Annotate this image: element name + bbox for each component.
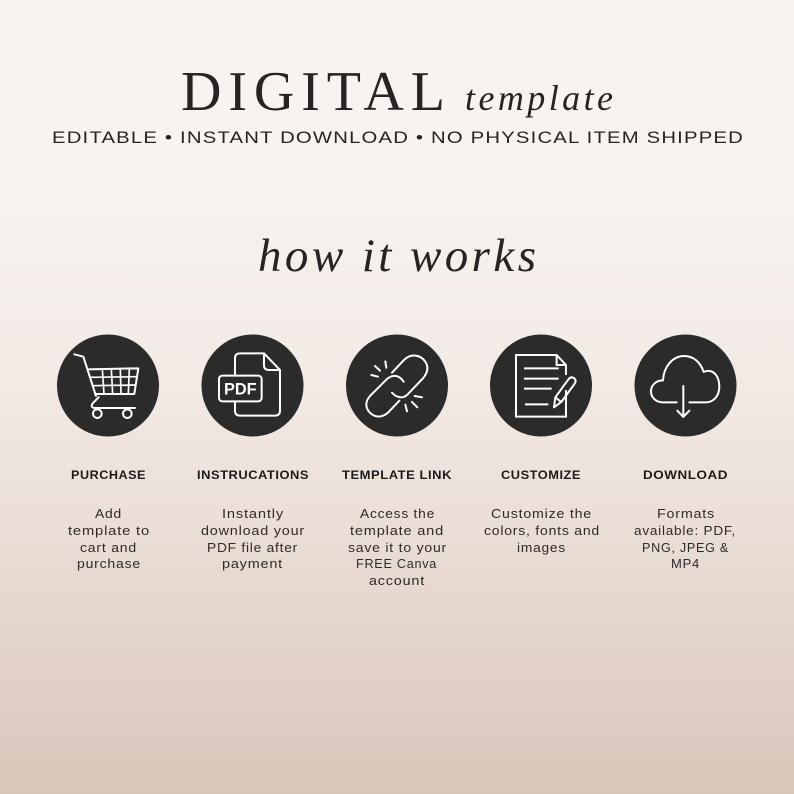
title: [181, 61, 613, 123]
description: instructions: download your: [201, 524, 305, 538]
label: template link: TEMPLATE LINK: [342, 468, 452, 482]
description: download: [634, 507, 736, 571]
description: template link: template and: [350, 524, 444, 538]
description: template link: [348, 507, 447, 588]
description: template link: FREE Canva: [356, 557, 437, 571]
step: purchase: [57, 334, 159, 571]
description: customize: colors, fonts and: [484, 524, 600, 538]
icon: shopping cart: [57, 334, 159, 436]
title: DIGITAL: [181, 61, 445, 123]
description: purchase: template to: [68, 524, 150, 538]
description: template link: account: [369, 574, 425, 588]
description: download: available: PDF,: [634, 524, 736, 538]
heading: how it works: how it works: [258, 230, 536, 282]
icon: PDF file: [202, 334, 304, 436]
description: purchase: Add: [95, 507, 122, 521]
description: customize: [484, 507, 600, 555]
description: instructions: PDF file after: [207, 541, 298, 555]
description: download: Formats: [657, 507, 715, 521]
description: customize: images: [517, 541, 566, 555]
description: instructions: [201, 507, 305, 571]
subtitle: EDITABLE • INSTANT DOWNLOAD • NO PHYSICAL ITEM SHIPPED: [52, 128, 744, 147]
description: purchase: [68, 507, 150, 571]
description: template link: Access the: [360, 507, 435, 521]
icon: broken chain link: [346, 334, 448, 436]
description: instructions: Instantly: [222, 507, 284, 521]
icon: PDF file: PDF: [224, 380, 257, 399]
icon: document with pencil: [490, 334, 592, 436]
description: template link: save it to your: [348, 541, 447, 555]
description: download: PNG, JPEG &: [642, 541, 729, 555]
step: template link: [342, 334, 452, 588]
title: template: [465, 78, 613, 118]
label: customize: CUSTOMIZE: [501, 468, 581, 482]
label: purchase: PURCHASE: [71, 468, 146, 482]
description: purchase: purchase: [77, 557, 141, 571]
step: customize: [484, 334, 600, 555]
description: customize: Customize the: [491, 507, 592, 521]
label: download: DOWNLOAD: [643, 468, 728, 482]
step: download: [634, 334, 736, 571]
step: instructions: [197, 334, 309, 571]
description: purchase: cart and: [80, 541, 137, 555]
icon: cloud download: [634, 334, 736, 436]
description: instructions: payment: [222, 557, 283, 571]
description: download: MP4: [671, 557, 700, 571]
label: instructions: INSTRUCATIONS: [197, 468, 309, 482]
